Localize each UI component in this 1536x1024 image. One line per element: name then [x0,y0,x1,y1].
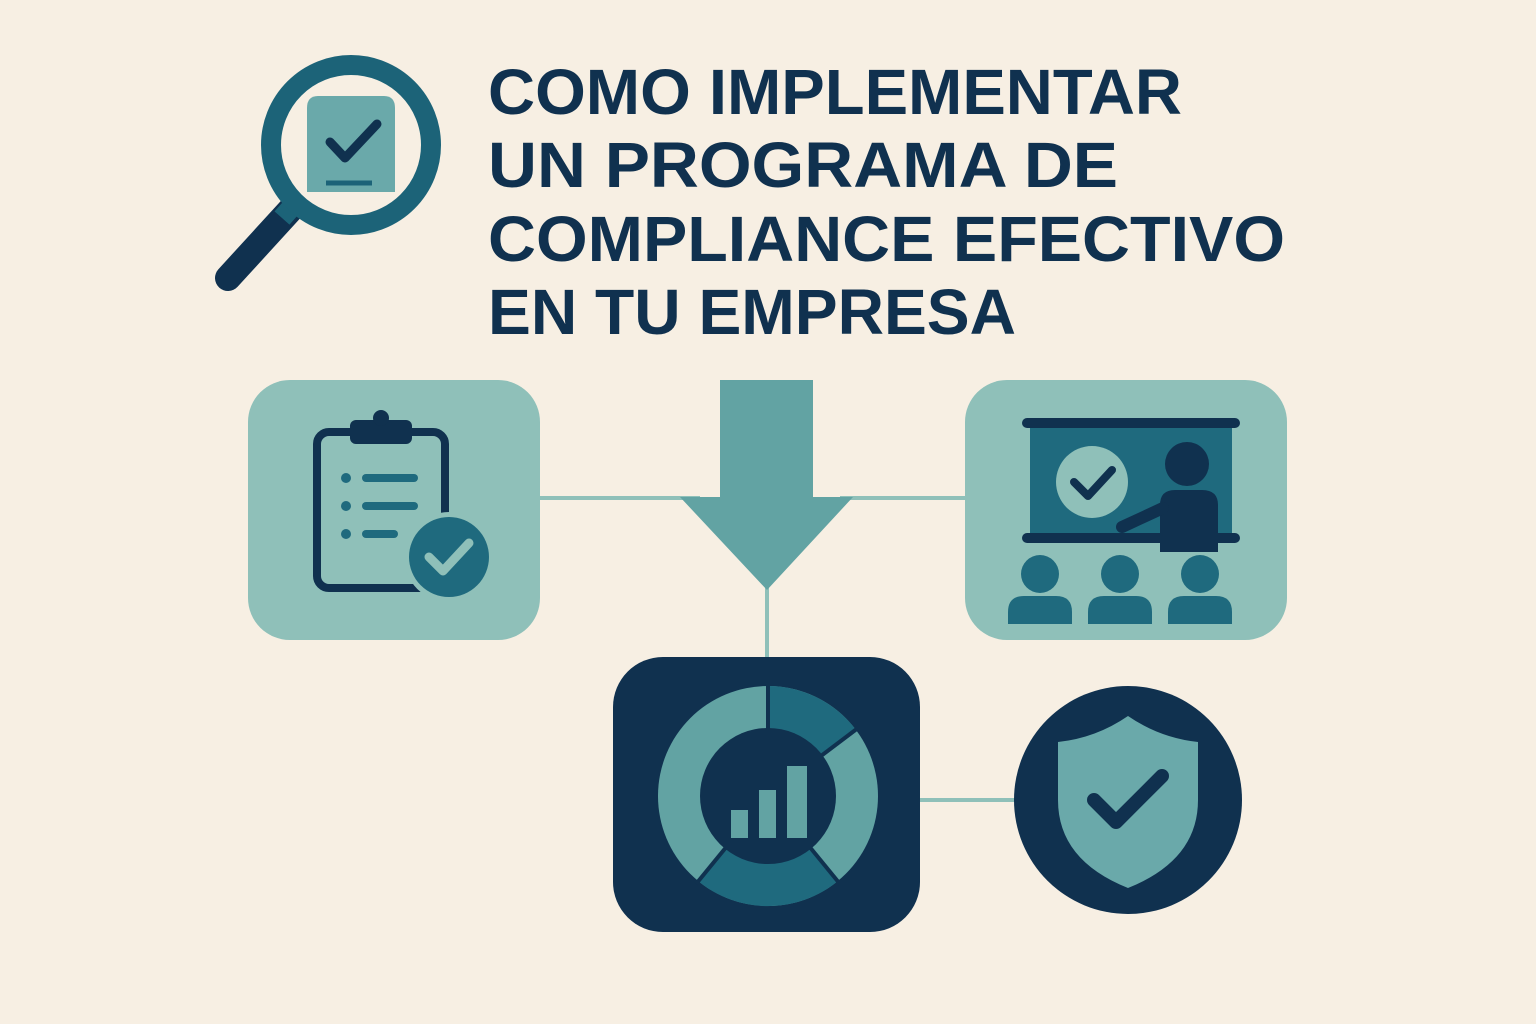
title [488,56,1285,348]
title: UN PROGRAMA DE [488,129,1118,201]
icon: shield [1014,686,1242,914]
title: COMPLIANCE EFECTIVO [488,203,1285,275]
title: EN TU EMPRESA [488,276,1016,348]
panel: training [965,380,1287,640]
connectors [540,498,1015,800]
title: COMO IMPLEMENTAR [488,56,1182,128]
panel: checklist [248,380,540,640]
arrow: down [680,380,853,590]
panel: analytics donut [613,657,920,932]
icon: magnifier [228,65,431,278]
